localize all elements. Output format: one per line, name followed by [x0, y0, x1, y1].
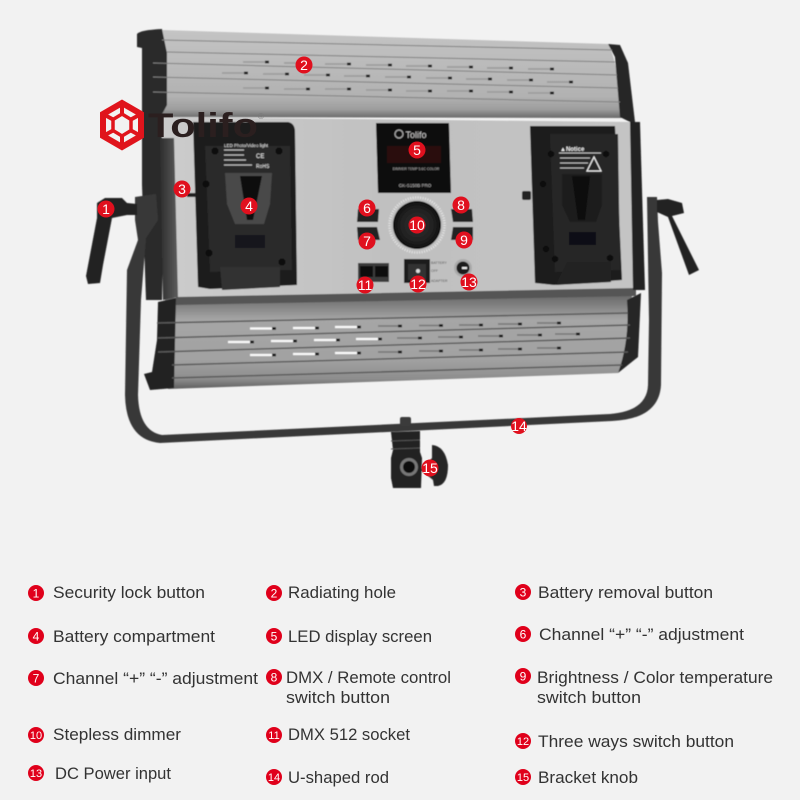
marker 7: 7: [363, 233, 371, 249]
legend item 9: switch button: [537, 689, 641, 707]
legend item 10: 10: [30, 730, 42, 742]
DMX 512 sockets: [358, 263, 389, 282]
marker 1: 1: [102, 201, 110, 217]
marker 10: 10: [409, 217, 425, 233]
right security lock handle: [657, 199, 699, 275]
legend item 12: 12: [517, 736, 529, 748]
left battery compartment: LED Photo/Video light: [224, 143, 269, 148]
left battery compartment: [193, 122, 297, 290]
legend item 3: Battery removal button: [538, 584, 713, 602]
marker 7: [358, 232, 376, 250]
U-shaped rod: [125, 194, 662, 443]
bottom housing with radiating holes: [144, 290, 641, 390]
marker 5: [408, 142, 426, 158]
legend item 15: Bracket knob: [538, 769, 638, 787]
legend item 1: 1: [33, 586, 40, 600]
legend item 11: DMX 512 socket: [288, 726, 410, 744]
stepless dimmer knob: [390, 198, 444, 252]
three ways switch: ADAPTER: [431, 279, 448, 283]
marker 3: 3: [178, 181, 186, 197]
right battery compartment: [522, 126, 622, 285]
LED display screen: Tolifo: [405, 130, 427, 140]
legend item 6: Channel “+” “-” adjustment: [539, 626, 744, 644]
legend item 9: Brightness / Color temperature: [537, 669, 773, 687]
marker 14: 14: [511, 418, 527, 434]
legend item 11: 11: [268, 730, 280, 742]
legend item 5: 5: [271, 630, 278, 644]
legend item 2: 2: [271, 586, 278, 600]
legend item 12: Three ways switch button: [538, 733, 734, 751]
legend item 9: 9: [520, 670, 527, 684]
marker 9: [456, 232, 472, 248]
legend item 1: Security lock button: [53, 584, 205, 602]
marker 6: [358, 200, 376, 216]
marker 4: [240, 198, 258, 214]
marker 8: [452, 196, 470, 214]
legend item 8: switch button: [286, 689, 390, 707]
marker 2: [296, 56, 312, 74]
legend item 4: Battery compartment: [53, 628, 215, 646]
legend item 15: 15: [517, 772, 529, 784]
brand logo: [103, 103, 264, 147]
marker 9: 9: [460, 232, 468, 248]
three ways switch: BATTERY: [431, 261, 447, 265]
battery removal button left: [187, 193, 196, 197]
DC power input: [454, 259, 472, 277]
legend item 4: 4: [33, 630, 40, 644]
left security lock handle: [86, 198, 137, 284]
legend item 8: DMX / Remote control: [286, 669, 451, 687]
LED display screen: DIMMER TEMP 5.6C COLOR: [393, 167, 440, 171]
marker 15: 15: [422, 460, 438, 476]
top housing with radiating holes: [137, 29, 635, 122]
legend item 14: 14: [268, 772, 280, 784]
left battery compartment: CE: [256, 154, 264, 160]
legend item 8: [266, 669, 451, 707]
legend item 2: Radiating hole: [288, 584, 396, 602]
legend item 9: [515, 668, 773, 707]
bracket mount with knob: [391, 417, 448, 488]
marker 12: 12: [410, 276, 426, 292]
marker 3: [174, 180, 190, 198]
legend item 6: 6: [520, 628, 527, 642]
marker 8: 8: [457, 197, 465, 213]
marker 4: 4: [245, 198, 253, 214]
product callout markers: [98, 56, 527, 476]
marker 6: 6: [363, 200, 371, 216]
legend item 3: 3: [520, 586, 527, 600]
left dark side of the light: [142, 48, 167, 300]
marker 2: 2: [300, 57, 308, 73]
three ways switch: OFF: [431, 269, 438, 273]
LED display screen: GK-S150B PRO: [399, 183, 432, 188]
marker 1: [98, 200, 114, 218]
main back panel: [160, 117, 645, 305]
right battery compartment: ▲Notice: [560, 147, 585, 153]
three ways switch: [404, 259, 448, 283]
legend item 14: U-shaped rod: [288, 769, 389, 787]
product: LED panel light: [86, 29, 699, 488]
legend item 10: Stepless dimmer: [53, 726, 182, 744]
left battery compartment: RoHS: [256, 164, 270, 170]
legend: [28, 584, 773, 787]
registered mark: ®: [258, 112, 264, 121]
legend item 13: DC Power input: [55, 765, 171, 783]
legend item 7: 7: [33, 672, 40, 686]
control buttons: [357, 209, 473, 240]
legend item 13: 13: [30, 768, 42, 780]
legend item 8: 8: [271, 670, 278, 684]
logo hexagon mark: [103, 103, 141, 147]
marker 5: 5: [413, 142, 421, 158]
LED display screen: [376, 123, 451, 193]
legend item 5: LED display screen: [288, 628, 432, 646]
logo wordmark: Tolifo: [148, 107, 258, 145]
legend item 7: Channel “+” “-” adjustment: [53, 670, 258, 688]
marker 13: 13: [461, 274, 477, 290]
marker 11: 11: [358, 277, 372, 293]
